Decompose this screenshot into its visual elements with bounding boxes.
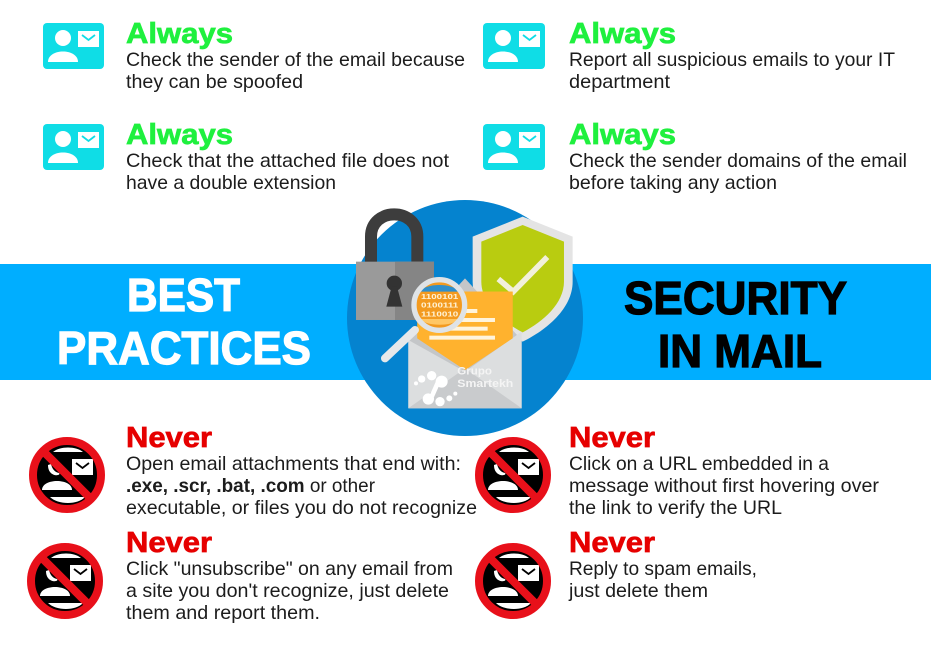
never tip: embedded url (476, 422, 880, 519)
icon: prohibited contact (30, 438, 104, 512)
heading: best practices: BEST (127, 269, 240, 321)
never tip: spam replies: Never (569, 527, 655, 559)
icon: magnifying glass: 1110010 (421, 310, 458, 319)
never tip: unsubscribe: a site you don't recognize, just delete (126, 580, 449, 602)
blue band (0, 264, 931, 380)
watermark text (457, 365, 513, 390)
icon: magnifying glass (385, 280, 465, 358)
never tip: attachments: Open email attachments that end with: (126, 453, 461, 475)
heading: best practices (57, 269, 311, 374)
never tip: embedded url: Click on a URL embedded in a (569, 453, 829, 475)
icon: logo dots (414, 371, 457, 406)
never tip: attachments (30, 422, 477, 519)
heading: security in mail: IN MAIL (658, 325, 822, 377)
never tip: attachments: executable, or files you do not recognize (126, 497, 477, 519)
always tip: report suspicious emails (483, 18, 895, 93)
icon: padlock (356, 214, 434, 320)
blue circle (347, 200, 583, 436)
always tip: check the sender (43, 18, 465, 93)
never tip: embedded url: the link to verify the URL (569, 497, 782, 519)
always tip: report suspicious emails: Always (569, 18, 676, 50)
never tip: unsubscribe (28, 527, 453, 624)
watermark text: Smartekh (457, 378, 513, 390)
never tip: spam replies: Reply to spam emails, (569, 558, 757, 580)
icon: contact card (43, 124, 104, 170)
icon: magnifying glass: 1100101 (421, 292, 458, 301)
always tip: sender domains: before taking any action (569, 172, 777, 194)
icon: prohibited contact (476, 438, 550, 512)
heading: security in mail (624, 272, 847, 377)
icon: shield with check (473, 217, 573, 342)
always tip: double extension: Check that the attached file does not (126, 150, 450, 172)
icon: contact card (483, 23, 545, 69)
never tip: attachments: Never (126, 422, 212, 454)
never tip: embedded url: message without first hovering over (569, 475, 880, 497)
heading: security in mail: SECURITY (624, 272, 847, 324)
heading: best practices: PRACTICES (57, 322, 311, 374)
always tip: double extension: have a double extension (126, 172, 336, 194)
icon: envelope with letter (408, 278, 522, 408)
always tip: double extension (43, 119, 450, 194)
always tip: check the sender: Check the sender of the email because (126, 49, 465, 71)
never tip: spam replies: just delete them (568, 580, 708, 602)
icon: magnifying glass: 0100111 (421, 301, 458, 310)
central illustration (347, 200, 583, 436)
never tip: unsubscribe: Click "unsubscribe" on any email from (126, 558, 453, 580)
always tip: check the sender: Always (126, 18, 233, 50)
always tip: check the sender: they can be spoofed (126, 71, 303, 93)
always tip: sender domains: Check the sender domains of the email (569, 150, 907, 172)
icon: prohibited contact (28, 544, 102, 618)
never tip: spam replies (476, 527, 757, 618)
never tip: embedded url: Never (569, 422, 655, 454)
never tip: unsubscribe: Never (126, 527, 212, 559)
always tip: sender domains (483, 119, 907, 194)
icon: contact card (43, 23, 104, 69)
always tip: double extension: Always (126, 119, 233, 151)
icon: contact card (483, 124, 545, 170)
watermark text: Grupo (457, 365, 493, 377)
always tip: report suspicious emails: department (569, 71, 671, 93)
never tip: attachments: .exe, .scr, .bat, .com or other (126, 475, 375, 497)
always tip: sender domains: Always (569, 119, 676, 151)
icon: prohibited contact (476, 544, 550, 618)
never tip: unsubscribe: them and report them. (126, 602, 320, 624)
always tip: report suspicious emails: Report all suspicious emails to your IT (569, 49, 895, 71)
